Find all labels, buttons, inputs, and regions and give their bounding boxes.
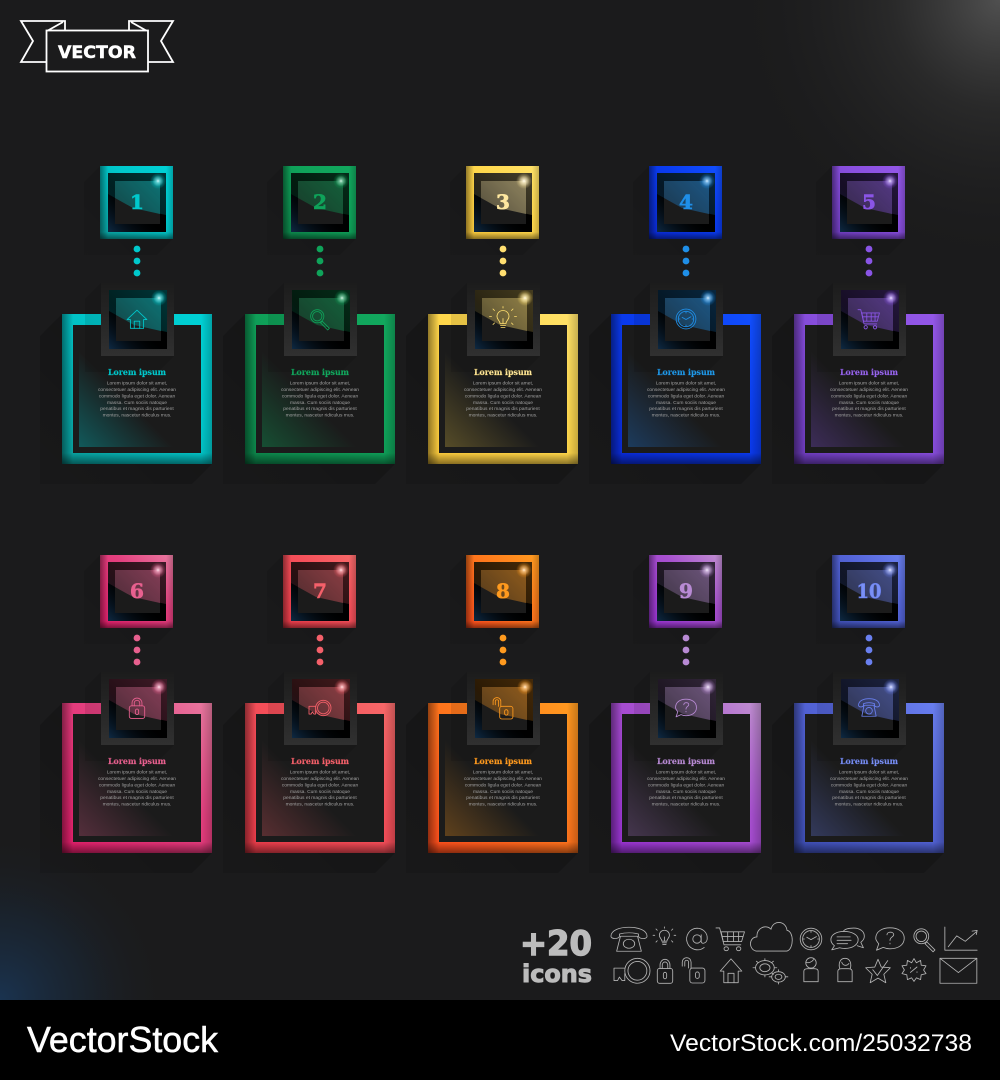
badge: vector ribbon bbox=[21, 21, 173, 72]
number tile 9: 9 bbox=[679, 579, 693, 603]
number tile 8: 8 bbox=[496, 579, 510, 603]
heading: Lorem ipsum bbox=[291, 756, 349, 766]
body text: consectetuer adipiscing elit. Aenean bbox=[830, 776, 908, 782]
heading: Lorem ipsum bbox=[657, 367, 715, 377]
body text: Lorem ipsum dolor sit amet, bbox=[656, 380, 716, 386]
number tile 9 bbox=[649, 555, 722, 628]
body text: montes, nascetur ridiculus mus. bbox=[835, 802, 903, 808]
body text: Lorem ipsum dolor sit amet, bbox=[290, 380, 350, 386]
card 6 bbox=[40, 555, 212, 873]
connector dots bbox=[317, 635, 323, 665]
body text: penatibus et magnis dis parturient bbox=[832, 406, 906, 412]
body text: massa. Cum sociis natoque bbox=[839, 400, 899, 406]
card 8 bbox=[406, 555, 578, 873]
card 1 bbox=[40, 166, 212, 484]
number tile 8 bbox=[466, 555, 539, 628]
number tile 6: 6 bbox=[130, 579, 144, 603]
heading: Lorem ipsum bbox=[840, 756, 898, 766]
icon tile: search bbox=[268, 283, 357, 372]
number tile 2: 2 bbox=[313, 190, 327, 214]
body text: Lorem ipsum dolor sit amet, bbox=[107, 380, 167, 386]
body text: Lorem ipsum dolor sit amet, bbox=[656, 770, 716, 776]
body text: massa. Cum sociis natoque bbox=[290, 400, 350, 406]
heading: Lorem ipsum bbox=[108, 367, 166, 377]
badge: vector ribbon: VECTOR bbox=[58, 43, 136, 63]
body text: Lorem ipsum dolor sit amet, bbox=[473, 770, 533, 776]
card 7 bbox=[223, 555, 395, 873]
card 3 bbox=[406, 166, 578, 484]
body text: commodo ligula eget dolor. Aenean bbox=[648, 393, 724, 399]
body text: montes, nascetur ridiculus mus. bbox=[103, 413, 171, 419]
heading: Lorem ipsum bbox=[108, 756, 166, 766]
body text: Lorem ipsum dolor sit amet, bbox=[839, 770, 899, 776]
body text: penatibus et magnis dis parturient bbox=[466, 795, 540, 801]
label: +20 icons: icons bbox=[522, 960, 592, 988]
body text: consectetuer adipiscing elit. Aenean bbox=[647, 387, 725, 393]
number tile 4: 4 bbox=[679, 190, 693, 214]
body text: montes, nascetur ridiculus mus. bbox=[835, 413, 903, 419]
body text: montes, nascetur ridiculus mus. bbox=[286, 413, 354, 419]
body text: Lorem ipsum dolor sit amet, bbox=[107, 770, 167, 776]
body text: penatibus et magnis dis parturient bbox=[649, 406, 723, 412]
label: +20 icons bbox=[520, 924, 592, 988]
body text: Lorem ipsum dolor sit amet, bbox=[839, 380, 899, 386]
frame panel bbox=[794, 703, 944, 853]
number tile 7: 7 bbox=[313, 579, 327, 603]
frame panel bbox=[62, 703, 212, 853]
frame panel bbox=[245, 314, 395, 464]
footer bar: VectorStock bbox=[27, 1019, 219, 1060]
number tile 10 bbox=[832, 555, 905, 628]
label: +20 icons: +20 bbox=[520, 924, 592, 964]
heading: Lorem ipsum bbox=[474, 367, 532, 377]
body text: montes, nascetur ridiculus mus. bbox=[469, 802, 537, 808]
body text: commodo ligula eget dolor. Aenean bbox=[465, 782, 541, 788]
number tile 7 bbox=[283, 555, 356, 628]
body text: penatibus et magnis dis parturient bbox=[100, 795, 174, 801]
icon tile: lock bbox=[85, 672, 174, 761]
body text: massa. Cum sociis natoque bbox=[107, 789, 167, 795]
frame panel bbox=[428, 314, 578, 464]
connector dots bbox=[866, 246, 872, 276]
card 9 bbox=[589, 555, 761, 873]
body text: commodo ligula eget dolor. Aenean bbox=[282, 782, 358, 788]
body text: consectetuer adipiscing elit. Aenean bbox=[464, 776, 542, 782]
body text: penatibus et magnis dis parturient bbox=[466, 406, 540, 412]
connector dots bbox=[500, 246, 506, 276]
icon tile: bulb bbox=[451, 283, 540, 372]
connector dots bbox=[134, 635, 140, 665]
card 2 bbox=[223, 166, 395, 484]
card 5 bbox=[772, 166, 944, 484]
frame panel bbox=[245, 703, 395, 853]
number tile 5 bbox=[832, 166, 905, 239]
footer bar: VectorStock.com/25032738 bbox=[670, 1030, 972, 1057]
body text: montes, nascetur ridiculus mus. bbox=[652, 802, 720, 808]
body text: commodo ligula eget dolor. Aenean bbox=[465, 393, 541, 399]
body text: commodo ligula eget dolor. Aenean bbox=[99, 782, 175, 788]
connector dots bbox=[500, 635, 506, 665]
number tile 3 bbox=[466, 166, 539, 239]
body text: penatibus et magnis dis parturient bbox=[100, 406, 174, 412]
number tile 1: 1 bbox=[130, 190, 144, 214]
icon tile: key bbox=[268, 672, 357, 761]
frame panel bbox=[611, 314, 761, 464]
icon tile: cart bbox=[817, 283, 906, 372]
body text: consectetuer adipiscing elit. Aenean bbox=[281, 776, 359, 782]
body text: penatibus et magnis dis parturient bbox=[283, 406, 357, 412]
body text: consectetuer adipiscing elit. Aenean bbox=[281, 387, 359, 393]
frame panel bbox=[62, 314, 212, 464]
body text: Lorem ipsum dolor sit amet, bbox=[290, 770, 350, 776]
body text: massa. Cum sociis natoque bbox=[656, 400, 716, 406]
body text: montes, nascetur ridiculus mus. bbox=[469, 413, 537, 419]
connector dots bbox=[317, 246, 323, 276]
card 10 bbox=[772, 555, 944, 873]
body text: Lorem ipsum dolor sit amet, bbox=[473, 380, 533, 386]
body text: montes, nascetur ridiculus mus. bbox=[652, 413, 720, 419]
connector dots bbox=[683, 635, 689, 665]
heading: Lorem ipsum bbox=[840, 367, 898, 377]
body text: commodo ligula eget dolor. Aenean bbox=[831, 393, 907, 399]
connector dots bbox=[866, 635, 872, 665]
body text: massa. Cum sociis natoque bbox=[839, 789, 899, 795]
heading: Lorem ipsum bbox=[657, 756, 715, 766]
body text: penatibus et magnis dis parturient bbox=[832, 795, 906, 801]
body text: montes, nascetur ridiculus mus. bbox=[103, 802, 171, 808]
frame panel bbox=[794, 314, 944, 464]
icon tile: home bbox=[85, 283, 174, 372]
heading: Lorem ipsum bbox=[474, 756, 532, 766]
body text: massa. Cum sociis natoque bbox=[107, 400, 167, 406]
icon set bbox=[611, 922, 977, 984]
body text: montes, nascetur ridiculus mus. bbox=[286, 802, 354, 808]
body text: consectetuer adipiscing elit. Aenean bbox=[464, 387, 542, 393]
icon tile: open lock bbox=[451, 672, 540, 761]
icon tile: phone bbox=[817, 672, 906, 761]
body text: commodo ligula eget dolor. Aenean bbox=[831, 782, 907, 788]
icon tile: question bbox=[634, 672, 723, 761]
number tile 3: 3 bbox=[496, 190, 510, 214]
number tile 1 bbox=[100, 166, 173, 239]
body text: penatibus et magnis dis parturient bbox=[283, 795, 357, 801]
heading: Lorem ipsum bbox=[291, 367, 349, 377]
number tile 5: 5 bbox=[862, 190, 876, 214]
body text: massa. Cum sociis natoque bbox=[473, 789, 533, 795]
body text: consectetuer adipiscing elit. Aenean bbox=[647, 776, 725, 782]
body text: commodo ligula eget dolor. Aenean bbox=[648, 782, 724, 788]
body text: penatibus et magnis dis parturient bbox=[649, 795, 723, 801]
number tile 2 bbox=[283, 166, 356, 239]
body text: consectetuer adipiscing elit. Aenean bbox=[98, 387, 176, 393]
connector dots bbox=[683, 246, 689, 276]
number tile 10: 10 bbox=[856, 579, 882, 603]
body text: consectetuer adipiscing elit. Aenean bbox=[98, 776, 176, 782]
number tile 6 bbox=[100, 555, 173, 628]
body text: massa. Cum sociis natoque bbox=[656, 789, 716, 795]
body text: commodo ligula eget dolor. Aenean bbox=[99, 393, 175, 399]
body text: massa. Cum sociis natoque bbox=[473, 400, 533, 406]
body text: commodo ligula eget dolor. Aenean bbox=[282, 393, 358, 399]
body text: consectetuer adipiscing elit. Aenean bbox=[830, 387, 908, 393]
number tile 4 bbox=[649, 166, 722, 239]
connector dots bbox=[134, 246, 140, 276]
footer bar bbox=[0, 1000, 1000, 1080]
body text: massa. Cum sociis natoque bbox=[290, 789, 350, 795]
frame panel bbox=[428, 703, 578, 853]
frame panel bbox=[611, 703, 761, 853]
card 4 bbox=[589, 166, 761, 484]
icon tile: clock bbox=[634, 283, 723, 372]
